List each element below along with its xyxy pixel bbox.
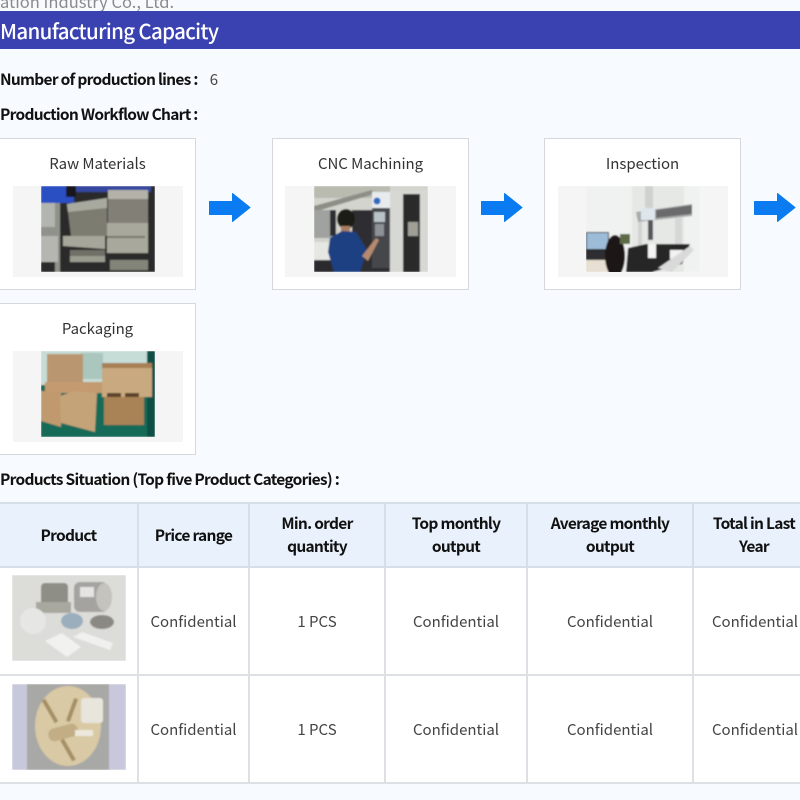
row 1 average output: Confidential — [567, 610, 653, 632]
photo: cnc machining — [285, 186, 456, 277]
row 1 total: Confidential — [712, 610, 798, 632]
header: average monthly — [528, 502, 694, 568]
row 1 top output — [386, 568, 528, 676]
row 2 top output — [386, 676, 528, 784]
row 1 moq: 1 PCS — [297, 610, 337, 632]
row 2 moq — [250, 676, 386, 784]
header: min order — [250, 502, 386, 568]
header: price range: Price range — [155, 524, 232, 546]
row 2 average output: Confidential — [567, 718, 653, 740]
header: average monthly: Average monthly — [551, 512, 669, 534]
header: top monthly: output — [432, 535, 480, 557]
row 1 average output — [528, 568, 694, 676]
products heading: Products Situation (Top five Product Categories) : — [0, 468, 339, 490]
header: product: Product — [41, 524, 96, 546]
card: inspection — [544, 138, 741, 290]
row 1 price — [139, 568, 250, 676]
photo: packaging — [13, 351, 183, 442]
header: min order: quantity — [287, 535, 347, 557]
production lines: Number of production lines : 6 — [0, 68, 218, 90]
row 1 product image — [0, 568, 139, 676]
label: raw materials: Raw Materials — [49, 153, 146, 174]
row 2 average output — [528, 676, 694, 784]
header: total last year: Year — [739, 535, 769, 557]
title bar — [0, 11, 800, 49]
label: inspection: Inspection — [606, 153, 679, 174]
row 1 total — [694, 568, 800, 676]
row 1 price: Confidential — [150, 610, 237, 632]
arrow 2 — [481, 193, 522, 222]
header: price range — [139, 502, 250, 568]
photo: raw materials — [13, 186, 183, 277]
title: Manufacturing Capacity — [0, 15, 218, 45]
row 2 moq: 1 PCS — [297, 718, 337, 740]
header: top monthly — [386, 502, 528, 568]
header: min order: Min. order — [281, 512, 353, 534]
card: cnc machining — [272, 138, 469, 290]
label: cnc machining: CNC Machining — [318, 153, 423, 174]
row 2 total — [694, 676, 800, 784]
workflow heading: Production Workflow Chart : — [0, 103, 198, 125]
label: packaging: Packaging — [62, 318, 133, 339]
header: total last year — [694, 502, 800, 568]
row 1 moq — [250, 568, 386, 676]
row 2 total: Confidential — [712, 718, 798, 740]
row 2 top output: Confidential — [413, 718, 499, 740]
row 2 price: Confidential — [150, 718, 237, 740]
header: product — [0, 502, 139, 568]
row 1 top output: Confidential — [413, 610, 499, 632]
header: average monthly: output — [586, 535, 634, 557]
header: total last year: Total in Last — [713, 512, 795, 534]
products table — [0, 502, 800, 784]
row 2 price — [139, 676, 250, 784]
photo: inspection — [558, 186, 728, 277]
header: top monthly: Top monthly — [412, 512, 500, 534]
card: packaging — [0, 303, 196, 455]
row 2 product image — [0, 676, 139, 784]
card: raw materials — [0, 138, 196, 290]
arrow 3 — [754, 193, 796, 222]
arrow 1 — [209, 193, 250, 222]
